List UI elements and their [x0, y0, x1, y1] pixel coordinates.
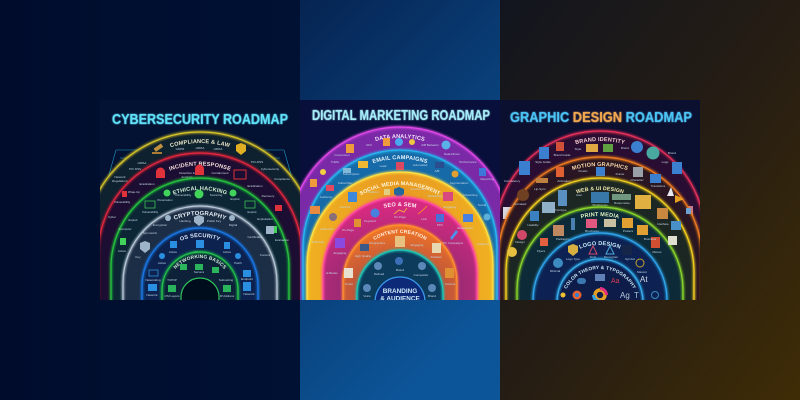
- captions: compliance: HIPAA: [196, 146, 204, 150]
- captions: seo: Engaging: [334, 251, 347, 255]
- ring label: data analytics: DATA ANALYTICS: [375, 134, 425, 141]
- background: left navy panel: [0, 0, 300, 400]
- captions: incident: Cyber: [108, 215, 116, 219]
- icons: color and typography: [560, 274, 658, 303]
- ring label: networking basics: NETWORKING BASICS: [173, 254, 226, 269]
- captions: print: Packaging: [556, 237, 570, 241]
- captions: ethical hacking: Active: [118, 249, 126, 253]
- ring label: motion graphics: MOTION GRAPHICS: [572, 162, 628, 170]
- icons: color and typography: Ag: [620, 291, 630, 300]
- captions: incident: [108, 171, 275, 219]
- captions: content: Smart: [345, 282, 353, 286]
- captions: seo: Retargeting: [457, 226, 473, 230]
- captions: brand: Brand Guide: [554, 153, 571, 157]
- captions: seo: Link: [421, 217, 427, 221]
- captions: web: Usability: [527, 223, 539, 227]
- icons: shields and keys: [140, 215, 274, 253]
- captions: ethical hacking: Exploit: [247, 210, 257, 214]
- captions: networking: [164, 270, 235, 298]
- captions: print: Brochures: [585, 229, 599, 233]
- ring: content creation: [340, 222, 460, 300]
- captions: brand research: Brand: [396, 268, 404, 272]
- ring label: color theory and typography: COLOR THEORY & TYPOGRAPHY: [564, 266, 636, 288]
- captions: print: Flyers: [537, 249, 546, 253]
- captions: os security: Patch: [234, 261, 242, 265]
- title: graphic design roadmap: GRAPHIC DESIGN ROADMAP: [510, 109, 692, 126]
- captions: brand research: [363, 268, 436, 298]
- captions: ethical hacking: Penetration: [157, 198, 173, 202]
- captions: incident: Containment: [211, 171, 229, 175]
- captions: seo: [326, 215, 473, 275]
- captions: incident: Recovery: [262, 194, 275, 198]
- captions: networking: Subnetting: [219, 278, 233, 282]
- captions: content: High Quality: [355, 254, 372, 258]
- captions: logo: Mascot: [637, 270, 647, 274]
- captions: incident: Eradication: [247, 184, 263, 188]
- captions: compliance: Network: [114, 175, 126, 179]
- icons: brand: [503, 141, 693, 219]
- captions: compliance: HIPAA: [138, 161, 146, 165]
- captions: networking: IP Address: [220, 294, 235, 298]
- captions: brand: Brand: [621, 146, 629, 150]
- captions: seo: On-Page: [394, 215, 406, 219]
- captions: email: Subscription: [343, 172, 360, 176]
- captions: logo: Logo Type: [566, 257, 580, 261]
- captions: social: Paid Ads: [312, 240, 324, 244]
- captions: compliance: Compliance: [274, 177, 290, 181]
- icons: color and typography: Aa: [611, 278, 620, 285]
- captions: content: Content: [445, 282, 455, 286]
- captions: analytics: [331, 143, 494, 181]
- captions: compliance: Regulations: [112, 179, 128, 183]
- captions: email: Audience: [320, 195, 333, 199]
- captions: email: Scheduling: [463, 193, 478, 197]
- captions: cryptography: Hashing: [179, 219, 191, 223]
- ring label: compliance and law: COMPLIANCE & LAW: [170, 139, 230, 147]
- captions: compliance: HIPAA: [214, 147, 222, 151]
- inner arch: [181, 278, 219, 301]
- captions: brand: Consistency: [504, 179, 521, 183]
- captions: networking: Servers: [194, 270, 205, 274]
- captions: email: Segmentation: [450, 181, 469, 185]
- captions: email: Lead: [380, 164, 387, 168]
- captions: social: Platform: [367, 190, 379, 194]
- icons: brand research: [363, 257, 436, 292]
- background: right dark amber panel: [500, 0, 800, 400]
- captions: analytics: Performance: [459, 160, 477, 164]
- icons: web: [517, 190, 681, 240]
- captions: os security: Active: [158, 261, 166, 265]
- captions: os security: [145, 250, 255, 297]
- ring: networking basics: [159, 249, 241, 300]
- ring label: incident response: INCIDENT RESPONSE: [168, 162, 232, 171]
- captions: cryptography: Key: [135, 255, 141, 259]
- captions: analytics: Reporting: [480, 177, 494, 181]
- icons: motion: [517, 167, 691, 214]
- icons: analytics: [310, 138, 486, 187]
- captions: logo: [550, 255, 647, 274]
- captions: web: Responsive: [614, 201, 630, 205]
- ring: incident response: [100, 150, 300, 300]
- captions: ethical hacking: Exploitation: [257, 217, 273, 221]
- ring: seo and sem: [320, 194, 480, 300]
- captions: web: [515, 193, 669, 244]
- captions: brand research: Voice: [363, 294, 371, 298]
- icons: content: [344, 236, 454, 278]
- captions: cryptography: Public Key: [207, 219, 222, 223]
- icons: social: [329, 187, 490, 222]
- captions: motion: Animated: [514, 202, 527, 206]
- ring label: social media management: SOCIAL MEDIA MANAGEMENT: [360, 181, 441, 195]
- ring: print media: [507, 204, 686, 300]
- captions: seo: PPC: [437, 223, 444, 227]
- icons: skulls and monitors: [120, 190, 277, 245]
- captions: incident: Detection &: [179, 171, 195, 175]
- ring label: brand identity: BRAND IDENTITY: [575, 137, 626, 144]
- captions: logo: Symbol: [625, 257, 635, 261]
- captions: social: Content: [340, 205, 350, 209]
- captions: networking: OSI Layers: [164, 294, 180, 298]
- captions: brand: Style Guide: [535, 160, 551, 164]
- ring label: seo and sem: SEO & SEM: [384, 202, 416, 208]
- captions: logo: Style: [590, 255, 597, 259]
- captions: cryptography: Digital: [229, 223, 237, 227]
- captions: web: Prototype: [554, 208, 567, 212]
- captions: brand research: Defined: [374, 272, 384, 276]
- captions: incident: Eradication: [139, 182, 155, 186]
- captions: social: Community: [410, 187, 426, 191]
- captions: ethical hacking: Vulnerability: [175, 193, 192, 197]
- captions: incident: Wrap-Up: [128, 190, 140, 194]
- captions: content: Podcast: [431, 255, 442, 259]
- captions: cryptography: Content: [260, 253, 270, 257]
- captions: content: Engaging: [411, 243, 424, 247]
- captions: motion: Character: [630, 178, 644, 182]
- captions: brand: Style: [575, 147, 582, 151]
- ring: data analytics: [300, 124, 500, 300]
- ring: os security: [139, 225, 261, 300]
- captions: os security: Active: [223, 250, 231, 254]
- captions: os security: Networking: [145, 278, 161, 282]
- captions: brand research: Competitor: [414, 273, 428, 277]
- captions: web: User: [576, 193, 582, 197]
- captions: social: Influencer: [320, 227, 334, 231]
- icons: print: [507, 218, 677, 257]
- captions: os security: Network: [243, 292, 255, 296]
- ring: cryptography: [120, 203, 280, 300]
- captions: compliance: PCI-DSS: [251, 160, 263, 164]
- captions: cryptography: Certificates: [247, 235, 263, 239]
- ring: color theory and typography: [554, 256, 659, 300]
- captions: incident: Analysis: [181, 175, 193, 179]
- title: cybersecurity roadmap: CYBERSECURITY ROADMAP: [112, 111, 288, 128]
- captions: content: Infographics: [369, 241, 386, 245]
- captions: ethical hacking: [118, 193, 289, 253]
- captions: web: Interface: [657, 222, 669, 226]
- ring: web and ui design: [503, 175, 697, 300]
- captions: logo: Monogram: [604, 255, 619, 259]
- captions: ethical hacking: Exploit: [128, 218, 138, 222]
- captions: web: Wireframes: [592, 203, 608, 207]
- captions: os security: Network: [146, 293, 158, 297]
- captions: analytics: ROI: [366, 143, 372, 147]
- captions: social: [312, 187, 489, 246]
- ring label: email campaigns: EMAIL CAMPAIGNS: [372, 155, 428, 164]
- captions: email: Subscriber: [338, 181, 352, 185]
- captions: ethical hacking: Scanning: [210, 193, 223, 197]
- ring: motion graphics: [500, 154, 700, 300]
- captions: social: Scheduling: [428, 194, 443, 198]
- captions: analytics: A/B Behavior: [421, 143, 439, 147]
- ring label: logo design: LOGO DESIGN: [579, 241, 621, 249]
- captions: print: Menus: [652, 250, 662, 254]
- captions: os security: Endpoint: [241, 277, 253, 281]
- ring: brand identity: [500, 128, 700, 235]
- icons: os security: [148, 240, 251, 291]
- panel: cybersecurity roadmap: [100, 112, 300, 300]
- icons: alarms: [122, 164, 282, 211]
- ring label: cryptography: CRYPTOGRAPHY: [174, 210, 227, 220]
- captions: social: Social: [478, 203, 486, 207]
- captions: social: Engaging: [444, 205, 457, 209]
- circuit traces: [108, 150, 292, 178]
- center label: branding and audience: & AUDIENCE: [380, 296, 421, 302]
- captions: seo: Keyword: [364, 219, 376, 223]
- ring label: print media: PRINT MEDIA: [580, 212, 619, 218]
- captions: compliance: PCI DSS: [129, 167, 141, 171]
- captions: os security: Active: [169, 250, 177, 254]
- ring: email campaigns: [300, 148, 500, 300]
- captions: ethical hacking: Vulnerability: [142, 210, 159, 214]
- icons: color and typography: At: [640, 275, 648, 284]
- icons: seo: [335, 206, 473, 248]
- captions: email: Automated: [413, 163, 428, 167]
- ring label: ethical hacking: ETHICAL HACKING: [172, 186, 227, 195]
- captions: cryptography: Encryption: [153, 223, 167, 227]
- captions: motion: Kinetic: [578, 169, 588, 173]
- captions: print: [537, 229, 662, 254]
- captions: seo: E-Books: [326, 271, 338, 275]
- captions: motion: Animation: [557, 179, 571, 183]
- ring: branding and audience: [375, 277, 425, 327]
- captions: incident: Vulnerability: [114, 200, 131, 204]
- captions: cryptography: Symmetric: [143, 231, 158, 235]
- captions: compliance: GDPR: [176, 147, 185, 151]
- ring: ethical hacking: [108, 174, 292, 300]
- icons: logo: [553, 244, 644, 268]
- captions: brand: Brand: [668, 151, 676, 155]
- captions: print: Business: [644, 237, 657, 241]
- captions: social: Analytics: [477, 242, 489, 246]
- icons: email: [310, 161, 458, 214]
- captions: motion: Lip-Sync: [534, 187, 546, 191]
- captions: ethical hacking: Evaluation: [275, 238, 289, 242]
- captions: ethical hacking: Computer: [118, 227, 132, 231]
- captions: seo: On-Page: [342, 228, 354, 232]
- background: middle blue panel: [300, 0, 500, 400]
- ring: brand research: [357, 250, 443, 301]
- captions: motion: Frame: [616, 172, 625, 176]
- captions: seo: PPC Campaigns: [441, 241, 464, 245]
- captions: analytics: Data-Driven: [444, 152, 460, 156]
- ring label: content creation: CONTENT CREATION: [373, 230, 427, 240]
- panel: graphic design roadmap: [500, 100, 700, 300]
- captions: os security: Windows: [194, 250, 207, 254]
- center label: branding and audience: BRANDING: [383, 288, 417, 295]
- title: digital marketing roadmap: DIGITAL MARKETING ROADMAP: [312, 107, 490, 124]
- captions: ethical hacking: Exploit: [230, 197, 240, 201]
- captions: email: [320, 163, 478, 199]
- ring: logo design: [530, 230, 670, 300]
- captions: brand research: Brand: [428, 294, 436, 298]
- captions: analytics: Conversion: [334, 153, 350, 157]
- captions: email: A/B: [435, 169, 439, 173]
- captions: brand: Logo: [662, 160, 669, 164]
- ring label: os security: OS SECURITY: [180, 233, 220, 240]
- captions: networking: TCP/IP: [167, 278, 177, 282]
- captions: content: [345, 241, 455, 286]
- captions: compliance: Cybersecurity: [261, 167, 280, 171]
- captions: motion: Transitions: [651, 184, 666, 188]
- captions: motion: [514, 169, 666, 206]
- icons: gavel and shield: [152, 143, 246, 155]
- captions: logo: Minimal: [550, 269, 560, 273]
- icons: color and typography: T: [634, 291, 639, 300]
- panel: digital marketing roadmap: [300, 100, 500, 300]
- captions: print: Posters: [623, 229, 634, 233]
- captions: brand: [504, 146, 676, 183]
- captions: cryptography: [135, 219, 270, 259]
- ring: social media management: [304, 169, 496, 300]
- captions: analytics: Traffic: [331, 160, 340, 164]
- captions: compliance: [112, 146, 290, 183]
- ring: compliance and law: [100, 129, 300, 228]
- icons: network: [168, 264, 231, 292]
- captions: web: Design: [515, 240, 525, 244]
- ring label: web and ui design: WEB & UI DESIGN: [576, 186, 624, 194]
